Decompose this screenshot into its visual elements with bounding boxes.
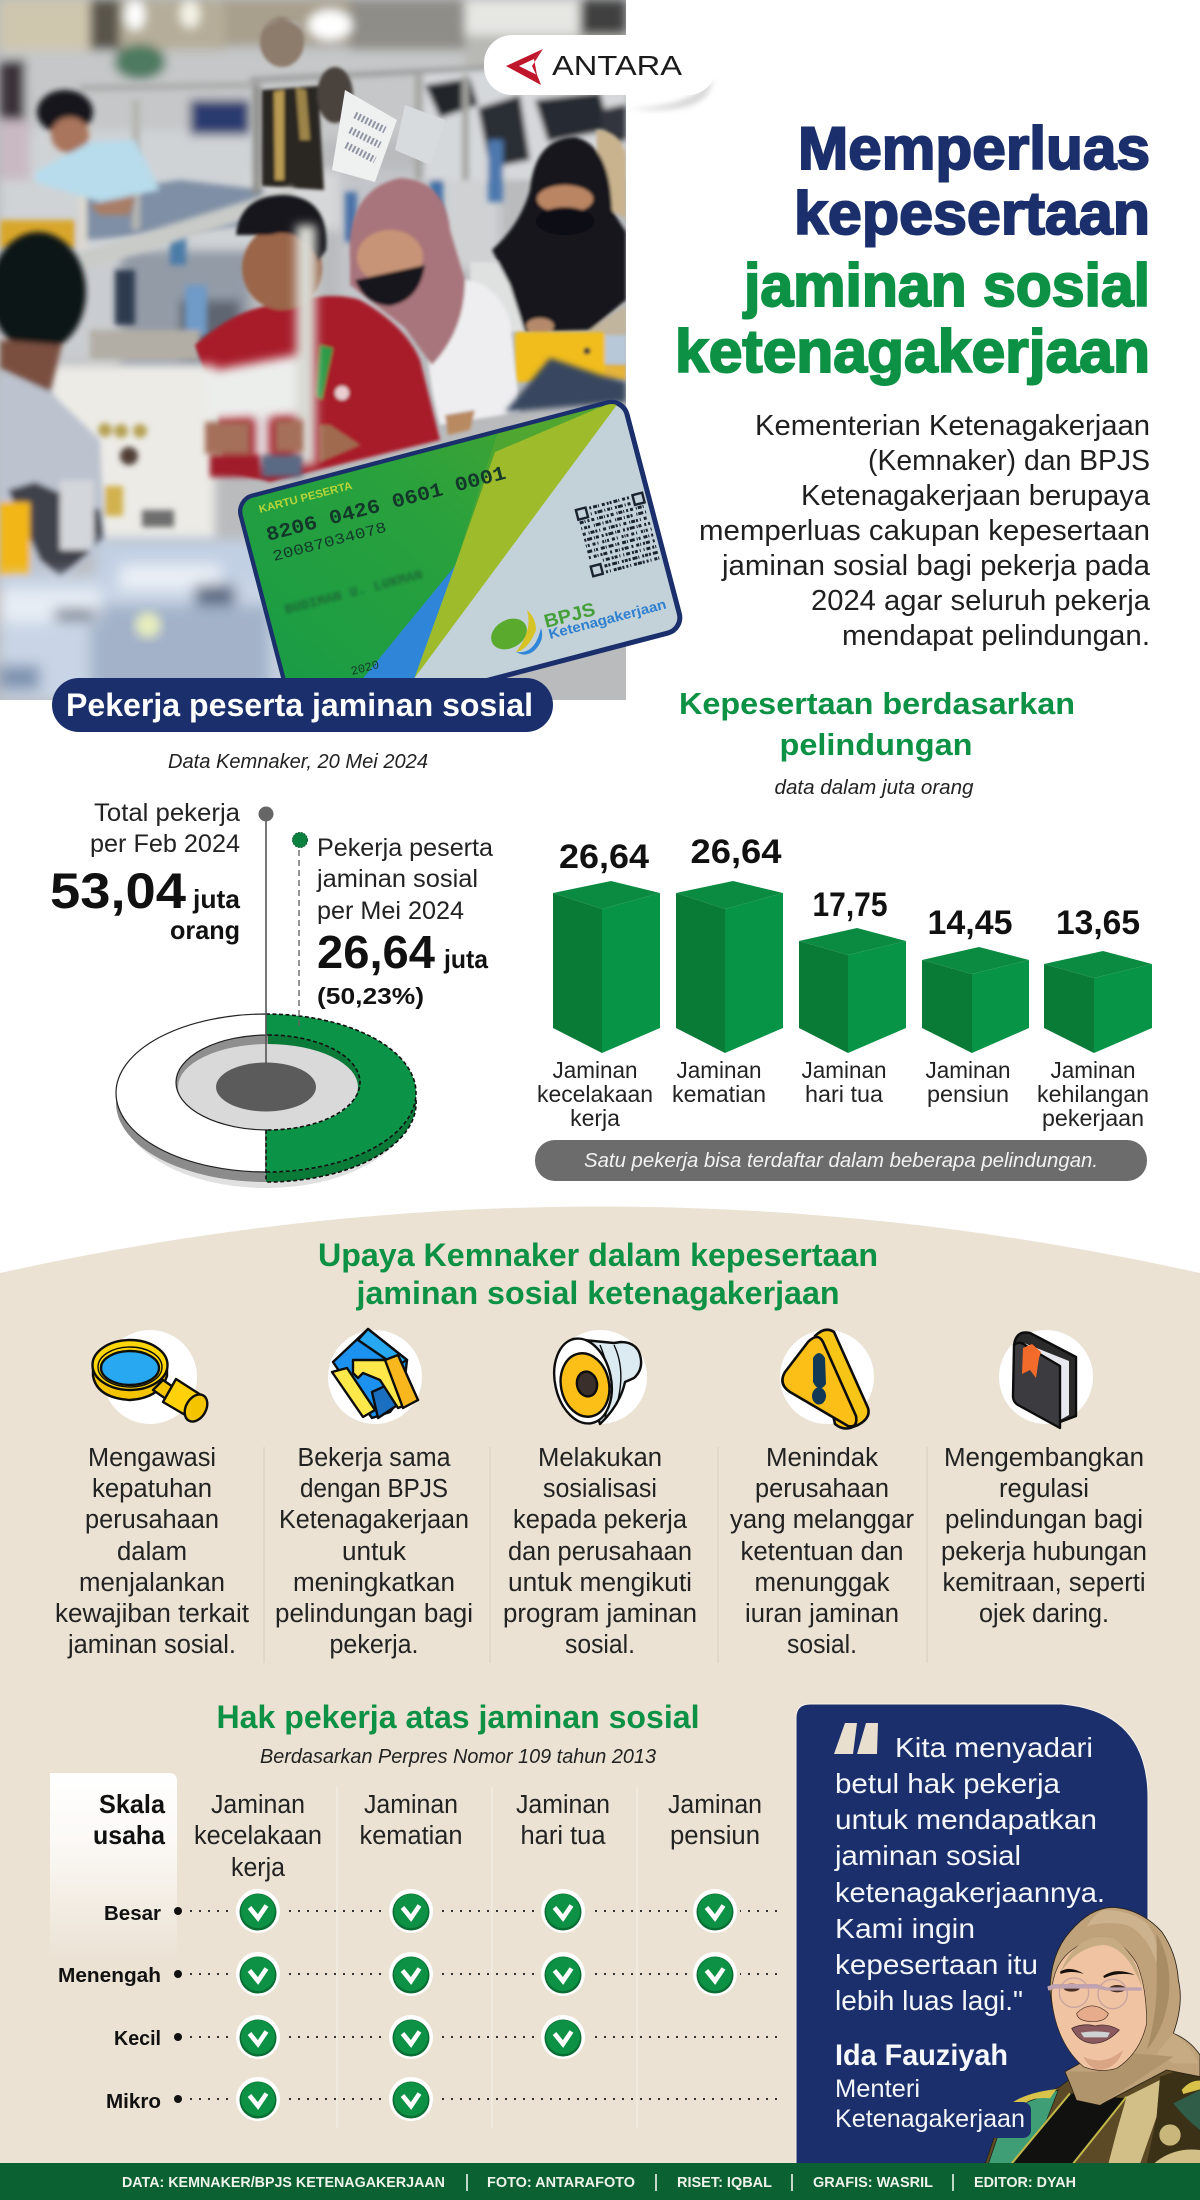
column 4 text: ketentuan dan xyxy=(740,1538,904,1566)
heading: Kepesertaan berdasarkan pelindungan: Kepesertaan berdasarkan xyxy=(679,686,1075,721)
table header: protection columns: kematian xyxy=(360,1822,462,1850)
quote attribution: Ketenagakerjaan xyxy=(835,2105,1025,2133)
photo detail: woman in pink hijab xyxy=(350,178,520,435)
row: Besar: Besar xyxy=(104,1902,161,1925)
quote text: kepesertaan itu xyxy=(835,1949,1038,1980)
table header: protection columns: kecelakaan xyxy=(194,1822,322,1850)
column 4 text: sosial. xyxy=(787,1631,857,1659)
table header: protection columns: kerja xyxy=(231,1854,286,1882)
column 5 text: ojek daring. xyxy=(979,1600,1109,1628)
quote text: Kami ingin xyxy=(835,1913,975,1944)
bar: Jaminan kehilangan pekerjaan 13,65: 13,65 xyxy=(1056,904,1140,942)
photo detail: man in red shirt xyxy=(195,195,440,482)
heading: Upaya Kemnaker: jaminan sosial ketenagakerjaan xyxy=(355,1275,840,1311)
photo detail: papers on the rack xyxy=(332,90,445,182)
bar labels: hari tua xyxy=(805,1081,883,1107)
column 4 text: yang melanggar xyxy=(730,1506,915,1534)
bar labels: Jaminan xyxy=(1050,1057,1136,1083)
column 3 text xyxy=(503,1444,697,1659)
heading: Kepesertaan berdasarkan pelindungan: pelindungan xyxy=(780,727,972,762)
stat: total workers: per Feb 2024 xyxy=(90,830,240,858)
column 2 text: pelindungan bagi xyxy=(275,1600,473,1628)
table: rights matrix xyxy=(50,1773,778,2128)
bar labels: kehilangan xyxy=(1037,1081,1149,1107)
row: Menengah xyxy=(58,1949,778,1999)
photo: garment factory workers xyxy=(0,0,626,700)
bar: Jaminan pensiun 14,45: 14,45 xyxy=(928,904,1012,942)
photo detail: dark fabric backdrop, upper right xyxy=(0,68,626,360)
column 4 text xyxy=(730,1444,915,1659)
row: Mikro xyxy=(106,2074,778,2124)
quote text: betul hak pekerja xyxy=(835,1768,1060,1799)
photo detail: worker at the left xyxy=(35,90,160,215)
bar labels: Jaminan xyxy=(926,1057,1010,1083)
card text: BPJS: BPJS xyxy=(542,599,598,633)
table header: Skala usaha: usaha xyxy=(93,1820,166,1850)
table header: protection columns xyxy=(194,1791,762,1882)
bar labels: pekerjaan xyxy=(1042,1105,1144,1131)
heading: Upaya Kemnaker xyxy=(318,1237,878,1311)
title: kepesertaan xyxy=(794,180,1150,247)
footer credits: RISET: IQBAL xyxy=(677,2174,772,2191)
bar: Jaminan kecelakaan kerja 26,64 xyxy=(553,838,660,1053)
heading pill: Pekerja peserta jaminan sosial xyxy=(52,678,553,732)
table header: protection columns: pensiun xyxy=(670,1822,760,1850)
icon: BPJS membership card xyxy=(238,400,682,678)
stat: enrolled workers: juta xyxy=(443,944,489,974)
column 3 text: sosial. xyxy=(565,1631,635,1659)
bar labels: pensiun xyxy=(927,1081,1009,1107)
footer credits: EDITOR: DYAH xyxy=(974,2174,1076,2191)
column 3 text: program jaminan xyxy=(503,1600,697,1628)
row: Menengah: Menengah xyxy=(58,1964,161,1987)
card text: Ketenagakerjaan: Ketenagakerjaan xyxy=(547,596,668,642)
icon: book xyxy=(999,1330,1093,1428)
intro paragraph: 2024 agar seluruh pekerja xyxy=(811,585,1151,617)
column 5 text xyxy=(941,1444,1147,1628)
panel: beige lower section xyxy=(0,1206,1200,2164)
column 4 text: iuran jaminan xyxy=(745,1600,899,1628)
column 5 text: pekerja hubungan xyxy=(941,1538,1147,1566)
note pill xyxy=(535,1140,1147,1181)
efforts text columns xyxy=(55,1444,1147,1659)
row: Besar xyxy=(104,1886,778,1936)
quote text: jaminan sosial xyxy=(834,1840,1021,1871)
column 4 text: Menindak xyxy=(766,1444,878,1472)
bar: Jaminan hari tua 17,75: 17,75 xyxy=(812,886,888,924)
column 1 text xyxy=(55,1444,249,1659)
photo detail: woman in black hijab xyxy=(470,130,626,338)
marker: total workers dot xyxy=(258,806,274,822)
quote attribution: Menteri xyxy=(835,2075,920,2103)
marker: enrolled workers dot xyxy=(292,832,308,848)
card text: second number: 20087034078 xyxy=(271,520,388,566)
photo detail: foreground worker, blurred xyxy=(0,232,174,585)
card text: blurred name: BUDIMAN U. LUKMAN xyxy=(283,567,425,619)
photo detail: blurred sewing machine in foreground xyxy=(50,225,316,540)
source note: Perpres: Berdasarkan Perpres Nomor 109 tahun 2013 xyxy=(260,1746,656,1768)
table header: protection columns: Jaminan xyxy=(516,1791,610,1819)
source note: data dalam juta orang: data dalam juta orang xyxy=(774,777,974,799)
icon: magnifying glass xyxy=(92,1330,212,1426)
column 3 text: untuk mengikuti xyxy=(508,1569,692,1597)
footer credits xyxy=(0,2163,1200,2200)
icon: handshake xyxy=(328,1329,422,1424)
footer credits: FOTO: ANTARAFOTO xyxy=(487,2174,635,2191)
column 3 text: kepada pekerja xyxy=(513,1506,688,1534)
table header: protection columns: Jaminan xyxy=(668,1791,762,1819)
portrait: Ida Fauziyah illustration xyxy=(985,1907,1200,2164)
stat: enrolled workers: jaminan sosial xyxy=(316,865,478,893)
stat: enrolled workers: 26,64 xyxy=(317,926,435,978)
bar chart: participation by protection xyxy=(553,833,1152,1053)
column 3 text: sosialisasi xyxy=(543,1475,657,1503)
column 5 text: Mengembangkan xyxy=(944,1444,1144,1472)
heading: Hak pekerja: Hak pekerja atas jaminan sosial xyxy=(216,1699,700,1735)
donut chart: 50,23% coverage xyxy=(116,806,416,1188)
column 2 text: Ketenagakerjaan xyxy=(279,1506,469,1534)
row: Kecil: Kecil xyxy=(114,2027,161,2050)
intro paragraph: Ketenagakerjaan berupaya xyxy=(801,480,1151,512)
bar labels: kerja xyxy=(570,1105,620,1131)
row: Mikro: Mikro xyxy=(106,2090,161,2113)
icon: warning triangle xyxy=(780,1330,874,1428)
card text: year: 2020 xyxy=(349,658,381,679)
bar: Jaminan kecelakaan kerja 26,64: 26,64 xyxy=(559,838,649,876)
stat: total workers: 53,04 xyxy=(50,863,186,919)
title xyxy=(675,115,1150,385)
column 4 text: perusahaan xyxy=(755,1475,889,1503)
table header: protection columns: Jaminan xyxy=(364,1791,458,1819)
table header: Skala usaha: Skala xyxy=(99,1789,166,1819)
card text: label: KARTU PESERTA xyxy=(258,480,354,516)
photo detail: diagonal machine arm xyxy=(80,195,295,262)
source note: Data Kemnaker: Data Kemnaker, 20 Mei 2024 xyxy=(168,751,428,773)
table header: Skala usaha xyxy=(93,1789,166,1850)
logo: ANTARA: ANTARA xyxy=(552,50,682,81)
bar: Jaminan kematian 26,64 xyxy=(676,833,783,1053)
intro paragraph: mendapat pelindungan. xyxy=(842,620,1150,652)
bar labels: kecelakaan xyxy=(537,1081,653,1107)
stat: enrolled workers: per Mei 2024 xyxy=(317,897,464,925)
footer credits: GRAFIS: WASRIL xyxy=(813,2174,933,2191)
photo detail: light spot on the fabric xyxy=(135,612,161,638)
column 2 text: pekerja. xyxy=(330,1631,418,1659)
title: ketenagakerjaan xyxy=(675,318,1150,385)
stat: enrolled workers xyxy=(316,834,493,1009)
column 2 text: untuk xyxy=(342,1538,406,1566)
bar: Jaminan hari tua 17,75 xyxy=(799,886,906,1053)
title: jaminan sosial xyxy=(743,252,1150,319)
quote text: Kita menyadari xyxy=(895,1732,1093,1763)
quote attribution: Ida Fauziyah xyxy=(835,2039,1008,2072)
photo detail: blue fabric in foreground xyxy=(0,540,285,700)
heading pill: Pekerja peserta jaminan sosial: Pekerja peserta jaminan sosial xyxy=(66,687,533,723)
quote text: lebih luas lagi." xyxy=(835,1985,1023,2016)
icon: speaker xyxy=(547,1330,647,1429)
quote text: ketenagakerjaannya. xyxy=(835,1877,1105,1908)
bar: Jaminan pensiun 14,45 xyxy=(922,904,1029,1053)
logo: ANTARA xyxy=(484,35,716,110)
bar: Jaminan kehilangan pekerjaan 13,65 xyxy=(1044,904,1152,1053)
stat: total workers: juta xyxy=(192,884,241,914)
column 2 text xyxy=(275,1444,473,1659)
heading: Upaya Kemnaker: Upaya Kemnaker dalam kepesertaan xyxy=(318,1237,878,1273)
title: Memperluas xyxy=(798,115,1150,182)
card text: card number: 8206 0426 0601 0001 xyxy=(264,463,509,548)
heading: Kepesertaan berdasarkan pelindungan xyxy=(679,686,1075,762)
quote text xyxy=(834,1732,1105,2016)
column 3 text: Melakukan xyxy=(538,1444,662,1472)
bar labels: Jaminan xyxy=(676,1057,762,1083)
bar labels: kematian xyxy=(672,1081,766,1107)
quote attribution xyxy=(830,2039,1031,2138)
column 1 text: Mengawasi xyxy=(88,1444,216,1472)
column 1 text: dalam xyxy=(117,1538,187,1566)
column 1 text: perusahaan xyxy=(85,1506,219,1534)
bar labels: Jaminan xyxy=(802,1057,886,1083)
intro paragraph: jaminan sosial bagi pekerja pada xyxy=(721,550,1151,582)
column 1 text: jaminan sosial. xyxy=(67,1631,236,1659)
stat: total workers xyxy=(50,799,241,945)
column 2 text: dengan BPJS xyxy=(300,1475,448,1503)
column 5 text: pelindungan bagi xyxy=(945,1506,1143,1534)
intro paragraph: (Kemnaker) dan BPJS xyxy=(868,445,1150,477)
photo detail: man at the back xyxy=(260,17,353,190)
icon: BPJS logo xyxy=(486,610,542,656)
stat: total workers: Total pekerja xyxy=(94,799,240,827)
note pill: Satu pekerja bisa terdaftar dalam beberapa pelindungan. xyxy=(584,1150,1098,1172)
stat: enrolled workers: Pekerja peserta xyxy=(317,834,493,862)
stat: total workers: orang xyxy=(170,915,240,945)
column 2 text: Bekerja sama xyxy=(298,1444,451,1472)
icon: quotation mark xyxy=(834,1723,878,1754)
column 4 text: menunggak xyxy=(754,1569,890,1597)
intro paragraph: memperluas cakupan kepesertaan xyxy=(699,515,1150,547)
bar labels: Jaminan xyxy=(552,1057,638,1083)
photo detail: hands behind machine, blurred xyxy=(205,420,303,477)
row: Kecil xyxy=(114,2012,778,2062)
column 1 text: kewajiban terkait xyxy=(55,1600,249,1628)
intro paragraph: Kementerian Ketenagakerjaan xyxy=(755,410,1150,442)
footer credits: DATA: KEMNAKER/BPJS KETENAGAKERJAAN xyxy=(122,2174,445,2191)
column 2 text: meningkatkan xyxy=(293,1569,455,1597)
column 1 text: kepatuhan xyxy=(92,1475,212,1503)
stat: enrolled workers: (50,23%) xyxy=(317,983,424,1009)
bar labels xyxy=(537,1057,1149,1131)
bar: Jaminan kematian 26,64: 26,64 xyxy=(690,833,782,871)
panel: quote xyxy=(796,1704,1148,2164)
table header: protection columns: Jaminan xyxy=(211,1791,305,1819)
column 1 text: menjalankan xyxy=(79,1569,225,1597)
photo detail: yellow box and dark fabric xyxy=(515,332,626,382)
icon: QR code xyxy=(576,493,659,576)
photo detail: navy fabric by the card xyxy=(505,358,626,412)
column 5 text: regulasi xyxy=(999,1475,1089,1503)
column 5 text: kemitraan, seperti xyxy=(942,1569,1146,1597)
quote text: untuk mendapatkan xyxy=(835,1804,1097,1835)
column 3 text: dan perusahaan xyxy=(508,1538,692,1566)
intro paragraph xyxy=(699,410,1151,652)
table header: protection columns: hari tua xyxy=(520,1822,606,1850)
